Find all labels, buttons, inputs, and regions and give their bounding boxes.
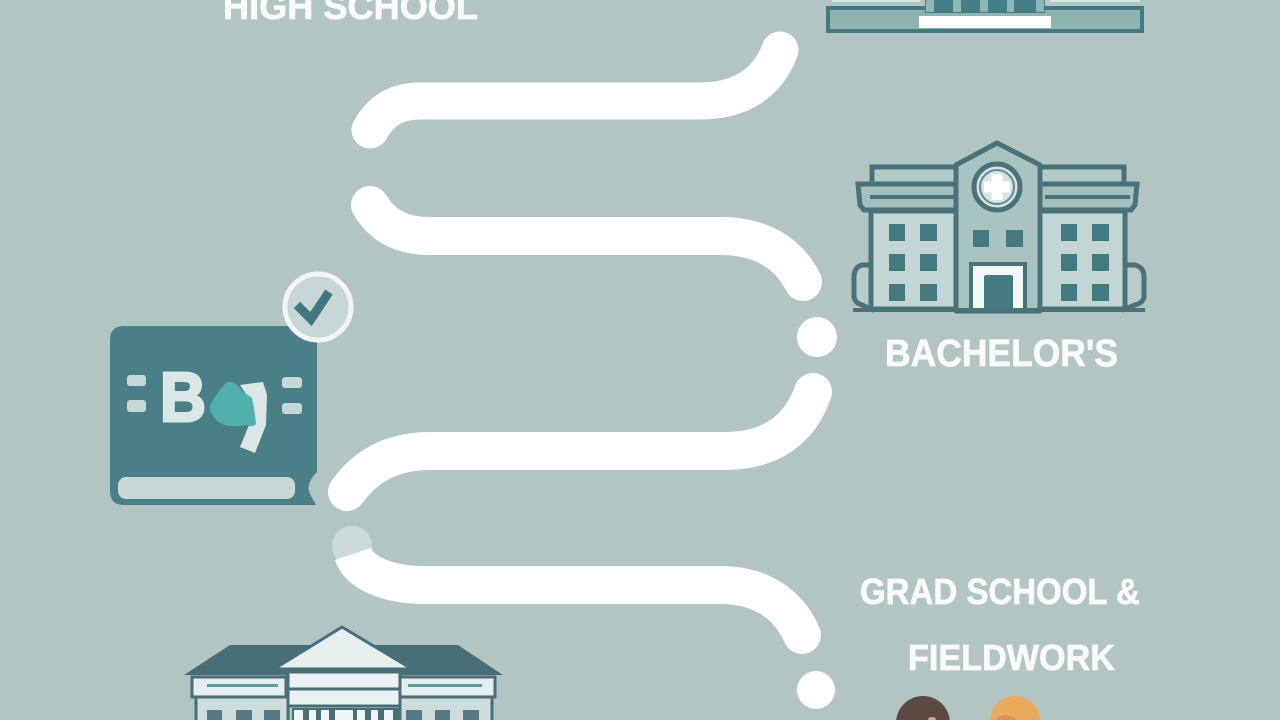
icon: book with B emblem — [110, 274, 351, 505]
connector dot: grad school — [797, 671, 835, 709]
columns — [292, 708, 400, 720]
label: grad school and fieldwork — [860, 571, 1140, 678]
connector path 2 — [370, 205, 803, 282]
book letter: B — [160, 358, 206, 436]
centre bands — [288, 672, 400, 706]
connector path 1 — [370, 50, 780, 130]
icon: student with brown hair — [896, 696, 950, 720]
windows — [889, 224, 1109, 301]
label: grad school and fieldwork: GRAD SCHOOL & — [860, 571, 1140, 612]
check badge — [285, 274, 351, 340]
label: grad school and fieldwork: FIELDWORK — [908, 637, 1115, 678]
icon: university building — [184, 627, 503, 720]
side wings — [854, 265, 1144, 309]
connector dot: bachelor's — [797, 317, 837, 357]
icon: high school building — [828, 0, 1142, 31]
book smudged glyph — [240, 382, 267, 453]
clock emblem — [974, 164, 1020, 210]
left wing — [192, 677, 495, 720]
connector path 3 — [347, 392, 813, 492]
icon: bachelor's building — [853, 143, 1145, 311]
connector path 4 — [353, 554, 821, 654]
roof — [184, 645, 503, 675]
central tower — [956, 143, 1040, 311]
door — [971, 264, 1025, 310]
wings — [858, 167, 1137, 309]
pediment — [274, 627, 412, 669]
icon: student with blonde hair — [990, 696, 1040, 720]
connector start cap — [332, 526, 372, 566]
label: bachelor's: BACHELOR'S — [885, 333, 1118, 375]
windows — [207, 710, 479, 720]
